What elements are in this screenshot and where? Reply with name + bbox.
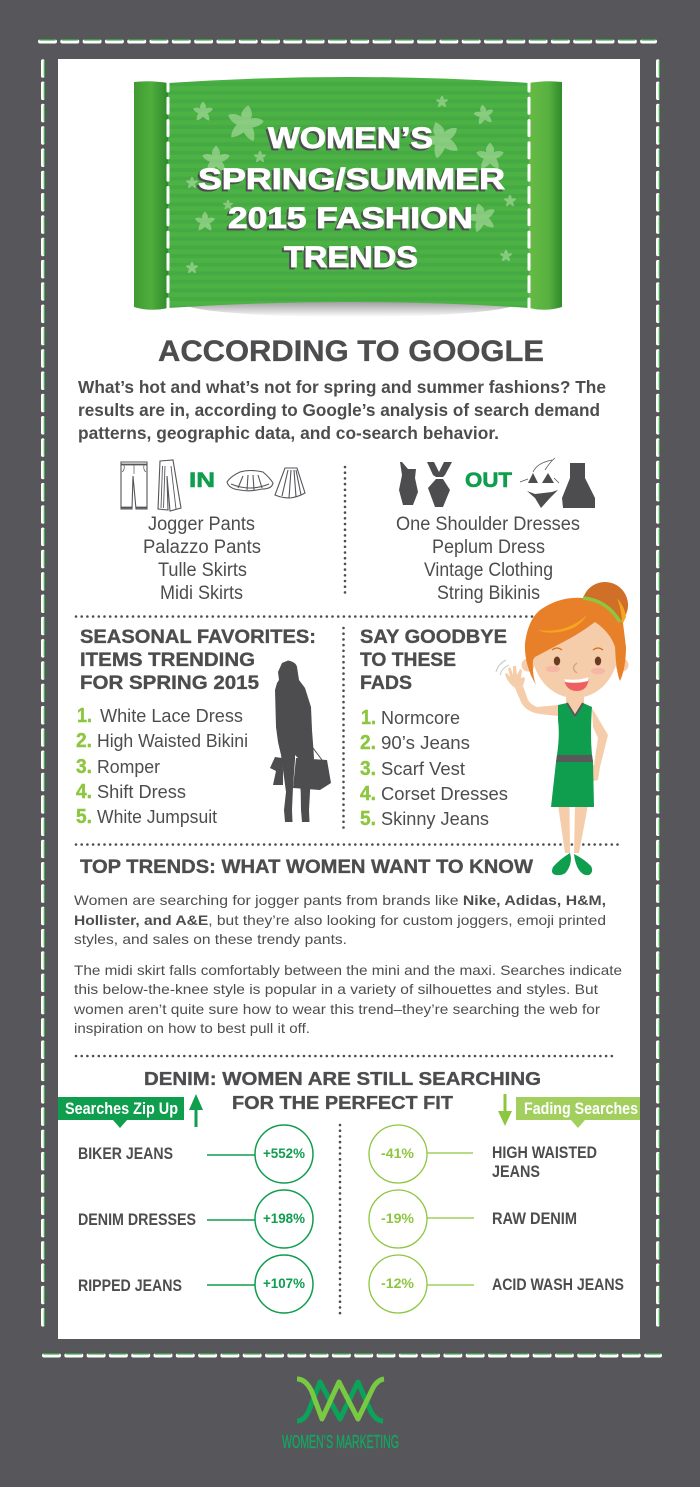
ears (522, 658, 534, 672)
legs (558, 805, 588, 853)
banner flowers (186, 96, 516, 273)
out label: OUT (465, 468, 512, 492)
tag: fading searches: Fading Searches (524, 1100, 638, 1118)
icon: shopper silhouette (270, 660, 331, 822)
out list (396, 514, 580, 604)
list: fads: 2. (360, 732, 376, 754)
cheeks (546, 666, 560, 672)
raised arm (515, 686, 558, 716)
icon: midi skirt (275, 468, 305, 498)
list: seasonal favorites: 2. (76, 730, 92, 752)
wave marks (496, 660, 509, 675)
banner left roll (134, 81, 168, 310)
list: seasonal favorites: Romper (97, 757, 160, 777)
heading: seasonal favorites (80, 627, 316, 694)
list: seasonal favorites: 5. (76, 806, 92, 828)
title: 2015 FASHION (228, 202, 473, 235)
waving hand (505, 666, 525, 688)
in icons: pants and skirts (121, 460, 305, 511)
banner shadow (180, 287, 520, 317)
list: fads: 1. (361, 707, 376, 729)
row: biker jeans (78, 1125, 313, 1183)
out list: One Shoulder Dresses (396, 514, 580, 535)
list: fads: Skinny Jeans (381, 809, 489, 829)
icon: string bikini (520, 458, 559, 508)
row: biker jeans: +552% (263, 1145, 306, 1161)
paragraph: jogger pants: Hollister, and A&E , but they’re also looking for custom joggers, emoji printed (74, 912, 606, 928)
nose (574, 663, 577, 673)
in list: Palazzo Pants (143, 537, 261, 558)
hair highlight (538, 615, 587, 633)
title: TRENDS (284, 241, 418, 274)
row: ripped jeans: RIPPED JEANS (78, 1277, 182, 1295)
head (532, 602, 618, 698)
row: biker jeans: BIKER JEANS (78, 1145, 173, 1163)
row: denim dresses: +198% (263, 1210, 306, 1226)
intro paragraph: results are in, according to Google’s analysis of search demand (78, 400, 600, 420)
row: high waisted jeans: -41% (381, 1145, 415, 1161)
hair (525, 598, 626, 685)
out list: String Bikinis (437, 583, 540, 604)
list: fads: 4. (360, 783, 376, 805)
row: raw denim (369, 1190, 577, 1248)
heading: denim: FOR THE PERFECT FIT (232, 1092, 454, 1113)
intro paragraph (78, 377, 606, 443)
row: acid wash jeans: -12% (381, 1275, 415, 1291)
list: seasonal favorites (76, 705, 248, 828)
dress neckline (567, 703, 583, 716)
icon: jogger pants (121, 462, 147, 509)
list: fads: Normcore (381, 708, 460, 728)
icon: one shoulder dress (399, 462, 418, 505)
tag: searches zip up (58, 1097, 184, 1128)
out list: Peplum Dress (432, 537, 545, 558)
heading: top trends: TOP TRENDS: WHAT WOMEN WANT TO KNOW (80, 856, 534, 878)
in list (143, 514, 261, 604)
row: acid wash jeans (369, 1255, 624, 1313)
icon: tulle skirt (227, 470, 273, 491)
paragraph: midi skirt: inspiration on how to best pull it off. (74, 1020, 310, 1036)
list: fads (360, 707, 508, 830)
shopping bag right (293, 758, 331, 790)
list: fads: 90’s Jeans (381, 733, 470, 753)
eyes (554, 656, 601, 666)
in list: Midi Skirts (160, 583, 243, 604)
row: raw denim: -19% (381, 1210, 415, 1226)
title: SPRING/SUMMER (198, 163, 505, 196)
heading: seasonal favorites: SEASONAL FAVORITES: (80, 627, 316, 648)
title (198, 122, 505, 274)
row: high waisted jeans: HIGH WAISTED (492, 1144, 597, 1162)
logo mark (297, 1379, 384, 1421)
list: seasonal favorites: 1. (77, 705, 92, 727)
headband (583, 598, 620, 622)
list: seasonal favorites: 4. (76, 781, 92, 803)
row: denim dresses: DENIM DRESSES (78, 1211, 196, 1229)
heading: say goodbye: FADS (360, 673, 412, 694)
row: high waisted jeans: JEANS (492, 1163, 540, 1181)
tag: fading searches (516, 1097, 640, 1128)
list: seasonal favorites: High Waisted Bikini (97, 731, 248, 751)
list: fads: Scarf Vest (381, 759, 465, 779)
intro paragraph: What’s hot and what’s not for spring and summer fashions? The (78, 377, 606, 397)
list: seasonal favorites: White Lace Dress (100, 706, 243, 726)
paragraph: midi skirt (73, 962, 622, 1036)
logo wordmark: WOMEN’S MARKETING (282, 1431, 399, 1452)
list: fads: 5. (360, 808, 376, 830)
heading: say goodbye: SAY GOODBYE (360, 627, 507, 648)
icon: palazzo pants (158, 460, 181, 511)
row: raw denim: RAW DENIM (492, 1210, 577, 1228)
row: ripped jeans: +107% (263, 1275, 306, 1291)
shoes (552, 853, 592, 875)
panel: white content card (58, 59, 640, 1339)
icon: peplum dress (562, 463, 595, 508)
stitched border (40, 40, 660, 1356)
heading: denim: DENIM: WOMEN ARE STILL SEARCHING (144, 1068, 541, 1089)
in label: IN (189, 468, 215, 492)
list: seasonal favorites: White Jumpsuit (97, 807, 217, 827)
heading: say goodbye (360, 627, 507, 694)
row: high waisted jeans (369, 1125, 597, 1183)
paragraph: jogger pants (74, 892, 606, 947)
dress (551, 703, 594, 807)
row: ripped jeans (78, 1255, 313, 1313)
belt (556, 755, 593, 762)
list: fads: 3. (360, 758, 376, 780)
arrow: up (189, 1094, 203, 1127)
heading: seasonal favorites: ITEMS TRENDING (80, 650, 255, 671)
banner right roll (529, 81, 562, 310)
paragraph: jogger pants: styles, and sales on these trendy pants. (74, 931, 347, 947)
hair bun (582, 582, 628, 628)
list: fads: Corset Dresses (381, 784, 508, 804)
title: WOMEN’S (268, 122, 433, 155)
out icons: dresses and bikini (399, 458, 595, 508)
in list: Jogger Pants (148, 514, 255, 535)
logo: women's marketing (282, 1379, 399, 1452)
out list: Vintage Clothing (424, 560, 553, 581)
heading: seasonal favorites: FOR SPRING 2015 (80, 673, 259, 694)
banner stitches (168, 76, 529, 316)
neck (566, 690, 584, 718)
tag: searches zip up: Searches Zip Up (65, 1100, 178, 1118)
heading: denim (144, 1068, 541, 1113)
mouth (564, 677, 589, 691)
in list: Tulle Skirts (158, 560, 247, 581)
heading: say goodbye: TO THESE (360, 650, 456, 671)
banner: green fabric label (134, 76, 562, 317)
shopping bag left (270, 757, 283, 785)
icon: v-neck dress (427, 462, 452, 507)
paragraph: midi skirt: women aren’t quite sure how to wear this trend–they’re searching the web for (73, 1001, 600, 1017)
illustration: waving woman (496, 582, 628, 875)
heading: according to Google: ACCORDING TO GOOGLE (158, 335, 544, 368)
row: acid wash jeans: ACID WASH JEANS (492, 1276, 624, 1294)
other arm and hand (583, 708, 608, 782)
row: denim dresses (78, 1190, 313, 1248)
arrow: down (498, 1094, 512, 1126)
paragraph: midi skirt: The midi skirt falls comfortably between the mini and the maxi. Searches indicate (74, 962, 622, 978)
list: seasonal favorites: 3. (76, 756, 92, 778)
list: seasonal favorites: Shift Dress (97, 782, 186, 802)
banner face (168, 77, 529, 308)
paragraph: jogger pants: Women are searching for jogger pants from brands like Nike, Adidas, H&M, (74, 892, 606, 908)
intro paragraph: patterns, geographic data, and co-search behavior. (78, 423, 499, 443)
paragraph: midi skirt: this below-the-knee style is popular in a variety of silhouettes and styles. But (74, 981, 598, 997)
